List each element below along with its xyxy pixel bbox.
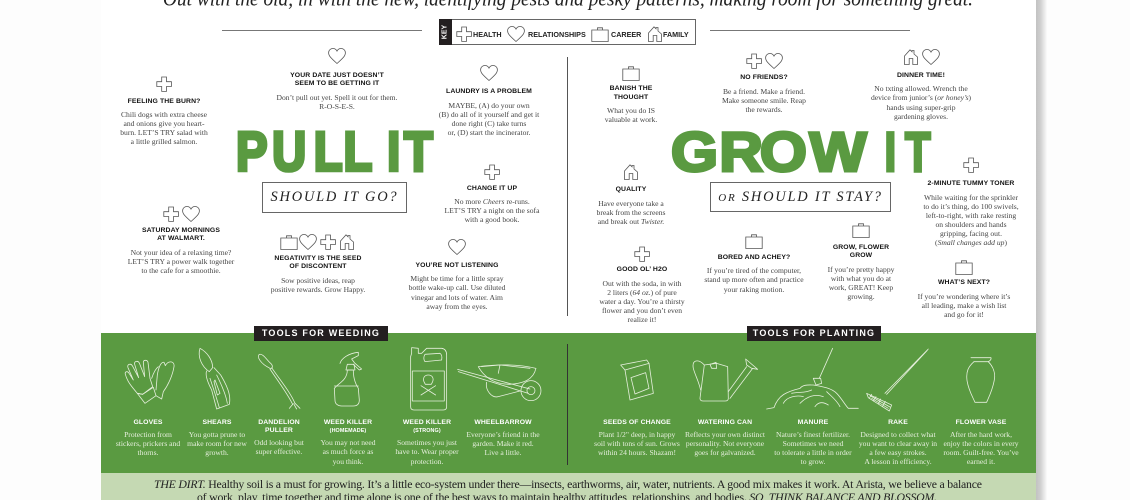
tip: negativity xyxy=(270,234,365,294)
icon: poison jug xyxy=(411,348,447,410)
tip: no friends: NO FRIENDS? xyxy=(740,74,788,81)
tool: shears: SHEARS xyxy=(202,418,232,426)
tip: banish the thought: THOUGHT xyxy=(614,94,648,101)
tip: what's next: WHAT’S NEXT? xyxy=(938,279,990,286)
tip: not listening: away from the eyes. xyxy=(426,302,488,311)
tip: grow flower grow: If you’re pretty happy xyxy=(828,265,894,274)
icon: flower vase xyxy=(967,358,995,402)
tip: dinner time: gardening gloves. xyxy=(894,112,948,121)
tip: feeling the burn: and onions give you heart- xyxy=(124,119,204,128)
tool: shears: make room for new xyxy=(187,439,247,448)
tip: banish the thought: What you do IS xyxy=(607,106,655,115)
tip: negativity: positive rewards. Grow Happy. xyxy=(271,285,365,294)
tip: banish the thought: BANISH THE xyxy=(610,85,652,92)
tip: feeling the burn: FEELING THE BURN? xyxy=(128,98,200,104)
icon: spray bottle xyxy=(334,352,362,406)
icon: manure pile xyxy=(767,348,858,409)
sheet shadow xyxy=(1036,0,1047,500)
tip: not listening: Might be time for a little spray xyxy=(410,274,504,283)
tip: dinner time: DINNER TIME! xyxy=(897,72,945,79)
icon: relationships xyxy=(507,26,525,42)
label: career: CAREER xyxy=(611,30,641,39)
tool: weed killer homemade xyxy=(320,418,376,466)
tool: weed killer strong: have to. Wear proper xyxy=(395,447,459,456)
tool: manure xyxy=(774,418,852,466)
tip: negativity: Sow positive ideas, reap xyxy=(281,276,355,285)
tool: gloves: GLOVES xyxy=(133,418,163,426)
tool: weed killer homemade: You may not need xyxy=(320,438,376,447)
tip: quality: break from the screens xyxy=(597,208,665,217)
tool: manure: Nature’s finest fertilizer. xyxy=(776,430,850,439)
tip: saturday mornings: SATURDAY MORNINGS xyxy=(142,227,220,234)
tip: quality: Have everyone take a xyxy=(598,199,664,208)
tool: gloves xyxy=(116,418,180,457)
tip: laundry: (B) do all of it yourself and get it xyxy=(439,110,539,119)
icon: shears xyxy=(199,348,230,409)
tool: manure: Sometimes we need xyxy=(783,439,843,448)
tool: gloves: stickers, prickers and xyxy=(116,439,180,448)
tip: good ol h2o: Out with the soda, in with xyxy=(603,279,681,288)
tip: not listening xyxy=(408,239,506,311)
band: the dirt xyxy=(101,473,1036,500)
tool: weed killer homemade: WEED KILLER xyxy=(324,418,372,426)
tip: laundry xyxy=(439,65,540,137)
label: family: FAMILY xyxy=(663,30,689,39)
tip: no friends xyxy=(722,53,806,114)
key tab xyxy=(439,19,452,45)
tip: tummy toner xyxy=(923,158,1019,247)
tool: seeds of change: SEEDS OF CHANGE xyxy=(603,418,671,426)
icon: health xyxy=(456,26,472,42)
tip: what's next xyxy=(918,260,1010,319)
icon: seed packet xyxy=(621,360,653,400)
label: health: HEALTH xyxy=(473,30,502,39)
tag: tools for planting xyxy=(747,326,881,341)
tip: saturday mornings: Not your idea of a relaxing time? xyxy=(131,248,231,257)
tip: bored and achey: stand up more often and practice xyxy=(704,275,804,284)
tip: bored and achey: If you’re tired of the computer, xyxy=(707,266,801,275)
key tab: KEY xyxy=(442,25,448,39)
icon: dandelion puller xyxy=(258,354,300,409)
tip: bored and achey: your raking motion. xyxy=(724,285,784,294)
tool: weed killer strong: (STRONG) xyxy=(413,428,441,434)
tip: what's next: If you’re wondering where it’s xyxy=(918,292,1010,301)
tip: tummy toner: left-to-right, with rake resting xyxy=(926,211,1016,220)
tip: laundry: MAYBE, (A) do your own xyxy=(448,101,530,110)
tag: tools for weeding xyxy=(254,326,388,341)
tip: grow flower grow: GROW xyxy=(850,252,872,259)
tool: watering can: Reflects your own distinct xyxy=(685,430,765,439)
tool: shears xyxy=(187,418,247,457)
tip: dinner time: hands using super-grip xyxy=(886,103,956,112)
icon: career xyxy=(591,27,609,42)
tool: flower vase: After the hard work, xyxy=(950,430,1012,439)
tip: your date: Don’t pull out yet. Spell it out for them. xyxy=(277,93,397,102)
tip: grow flower grow: work, GREAT! Keep xyxy=(829,283,893,292)
tip: not listening: YOU’RE NOT LISTENING xyxy=(416,262,498,269)
tip: feeling the burn: Chili dogs with extra cheese xyxy=(121,110,207,119)
tool: weed killer strong: protection. xyxy=(411,457,443,466)
tip: good ol h2o: water a day. You’re a thirsty xyxy=(599,297,685,306)
icon: watering can xyxy=(693,359,758,401)
tip: tummy toner: While waiting for the sprinkler xyxy=(924,193,1018,202)
tip: good ol h2o: 2 liters (64 oz.) of pure xyxy=(607,288,677,297)
rule right xyxy=(710,30,910,31)
tip: good ol h2o: GOOD OL’ H2O xyxy=(617,266,667,273)
tool: wheelbarrow xyxy=(466,418,540,457)
tool: watering can: goes for galvanized. xyxy=(694,448,756,457)
tag: tools for planting: TOOLS FOR PLANTING xyxy=(753,328,875,338)
tool: flower vase xyxy=(943,418,1019,466)
tip: no friends: the rewards. xyxy=(745,105,783,114)
tip: grow flower grow xyxy=(828,223,894,301)
tool: weed killer strong: Sometimes you just xyxy=(397,438,457,447)
tool: wheelbarrow: WHEELBARROW xyxy=(474,418,532,426)
tip: negativity: NEGATIVITY IS THE SEED xyxy=(274,255,362,262)
tip: saturday mornings xyxy=(128,206,234,275)
tip: grow flower grow: growing. xyxy=(847,292,875,301)
tip: quality: and break out Twister. xyxy=(598,217,664,226)
tip: feeling the burn: a little grilled salmon. xyxy=(131,137,197,146)
tool: flower vase: earned it. xyxy=(967,457,995,466)
tool: weed killer homemade: (HOMEMADE) xyxy=(330,428,366,434)
tip: your date: SEEM TO BE GETTING IT xyxy=(295,80,379,87)
icon: wheelbarrow xyxy=(458,365,541,401)
tip: negativity: OF DISCONTENT xyxy=(289,263,347,270)
tool: weed killer homemade: you think. xyxy=(333,457,363,466)
tools divider xyxy=(567,344,568,465)
tool: seeds of change xyxy=(594,418,680,457)
tip: what's next: all leading, make a wish list xyxy=(922,301,1006,310)
tool: flower vase: FLOWER VASE xyxy=(956,418,1006,426)
tip: laundry: LAUNDRY IS A PROBLEM xyxy=(446,88,532,95)
tip: your date: R-O-S-E-S. xyxy=(319,102,355,111)
label: relationships: RELATIONSHIPS xyxy=(528,30,586,39)
tip: no friends: Be a friend. Make a friend. xyxy=(723,87,805,96)
tool: seeds of change: soil with tons of sun. Grows xyxy=(594,439,680,448)
tip: tummy toner: gripping, facing out. xyxy=(940,229,1002,238)
tip: dinner time: No txting allowed. Wrench the xyxy=(874,84,968,93)
tool: wheelbarrow: Everyone’s friend in the xyxy=(466,430,540,439)
tip: bored and achey: BORED AND ACHEY? xyxy=(718,254,790,261)
tip: what's next: and go for it! xyxy=(944,310,984,319)
icon: family xyxy=(648,26,662,42)
tool: dandelion puller: Odd looking but xyxy=(254,438,304,447)
subheading: should it go xyxy=(262,182,407,213)
tool: rake: RAKE xyxy=(888,418,908,426)
tool: manure: to grow. xyxy=(801,457,825,466)
icon: rake xyxy=(867,349,928,411)
tool: rake xyxy=(859,418,937,466)
tip: dinner time: device from junior’s (or honey’s) xyxy=(871,93,971,102)
tip: feeling the burn xyxy=(120,76,208,146)
tool: manure: to tolerate a little in order xyxy=(774,448,852,457)
tool: wheelbarrow: Live a little. xyxy=(485,448,521,457)
subheading: should it stay xyxy=(710,182,891,212)
tool: shears: growth. xyxy=(205,448,229,457)
tip: banish the thought xyxy=(604,66,657,124)
tip: no friends: Make someone smile. Reap xyxy=(722,96,806,105)
tip: laundry: or, (D) start the incinerator. xyxy=(448,128,530,137)
tool: flower vase: room. Guilt-free. You’ve xyxy=(943,448,1019,457)
rule left xyxy=(222,30,422,31)
tip: quality xyxy=(596,164,666,226)
tool: seeds of change: within 24 hours. Shazam! xyxy=(598,448,676,457)
tool: rake: A lesson in efficiency. xyxy=(864,457,932,466)
tag: tools for weeding: TOOLS FOR WEEDING xyxy=(262,328,380,338)
tip: tummy toner: 2-MINUTE TUMMY TONER xyxy=(928,180,1014,187)
tool: seeds of change: Plant 1/2" deep, in happy xyxy=(599,430,675,439)
tip: saturday mornings: AT WALMART. xyxy=(157,235,205,242)
tip: feeling the burn: burn. LET’S TRY salad with xyxy=(120,128,208,137)
tool: manure: MANURE xyxy=(798,418,828,426)
tip: your date: YOUR DATE JUST DOESN’T xyxy=(290,72,384,79)
tip: change it up xyxy=(444,164,540,224)
the dirt text: THE DIRT. Healthy soil is a must for growing. It’s a little eco-system under there—insects, earthworms, air, water, nutrients. A good mix makes it work. At Arista, we believe a balance xyxy=(154,477,982,491)
tip: change it up: No more Cheers re-runs. xyxy=(454,197,530,206)
tip: saturday mornings: LET’S TRY a power walk together xyxy=(128,257,234,266)
tip: bored and achey xyxy=(704,234,804,294)
tip: not listening: vinegar and lots of water. Aim xyxy=(411,293,503,302)
tool: rake: you want to clear away in xyxy=(859,439,937,448)
tip: good ol h2o: realize it! xyxy=(628,315,656,324)
tool: gloves: thorns. xyxy=(138,448,158,457)
tip: saturday mornings: to the cafe for a smoothie. xyxy=(141,266,221,275)
tip: good ol h2o xyxy=(599,246,685,324)
tip: grow flower grow: with what you do at xyxy=(831,274,891,283)
subheading: should it stay: OR SHOULD IT STAY? xyxy=(718,189,883,205)
tool: dandelion puller: DANDELION xyxy=(258,418,300,426)
tool: dandelion puller: PULLER xyxy=(265,427,293,434)
tool: weed killer strong xyxy=(395,418,459,466)
tools illustrations xyxy=(124,347,996,412)
tool: wheelbarrow: garden. Make it red. xyxy=(472,439,534,448)
tip: your date xyxy=(276,48,397,111)
tip: change it up: LET’S TRY a night on the sofa xyxy=(445,206,539,215)
tip: tummy toner: to do it’s thing, do 100 swivels, xyxy=(923,202,1019,211)
tip: tummy toner: (Small changes add up) xyxy=(935,238,1007,247)
tool: watering can xyxy=(685,418,765,457)
subheading: should it go: SHOULD IT GO? xyxy=(271,189,398,205)
tool: watering can: personality. Not everyone xyxy=(686,439,764,448)
tip: quality: QUALITY xyxy=(616,186,646,193)
tip: dinner time xyxy=(871,49,971,121)
tip: good ol h2o: flower and you don’t even xyxy=(602,306,682,315)
tip: change it up: with a good book. xyxy=(465,215,519,224)
tool: shears: You gotta prune to xyxy=(189,430,245,439)
key legend xyxy=(439,19,696,45)
tool: weed killer homemade: as much force as xyxy=(323,447,373,456)
tip: not listening: bottle wake-up call. Use diluted xyxy=(409,283,505,292)
tool: rake: Designed to collect what xyxy=(860,430,936,439)
panel: tools xyxy=(101,333,1036,473)
tool: gloves: Protection from xyxy=(124,430,172,439)
icon: gloves xyxy=(125,360,174,403)
tool: dandelion puller xyxy=(254,418,304,456)
tip: laundry: done right (C) take turns xyxy=(452,119,526,128)
tool: weed killer strong: WEED KILLER xyxy=(403,418,451,426)
tip: change it up: CHANGE IT UP xyxy=(467,184,517,192)
tool: watering can: WATERING CAN xyxy=(698,418,752,426)
tool: rake: a few easy strokes. xyxy=(869,448,927,457)
tool: dandelion puller: super effective. xyxy=(256,447,302,456)
tip: tummy toner: on shoulders and hands xyxy=(935,220,1007,229)
tip: grow flower grow: GROW, FLOWER xyxy=(833,244,889,251)
tool: flower vase: enjoy the colors in every xyxy=(943,439,1019,448)
tip: banish the thought: valuable at work. xyxy=(605,115,657,124)
center divider xyxy=(567,57,568,316)
